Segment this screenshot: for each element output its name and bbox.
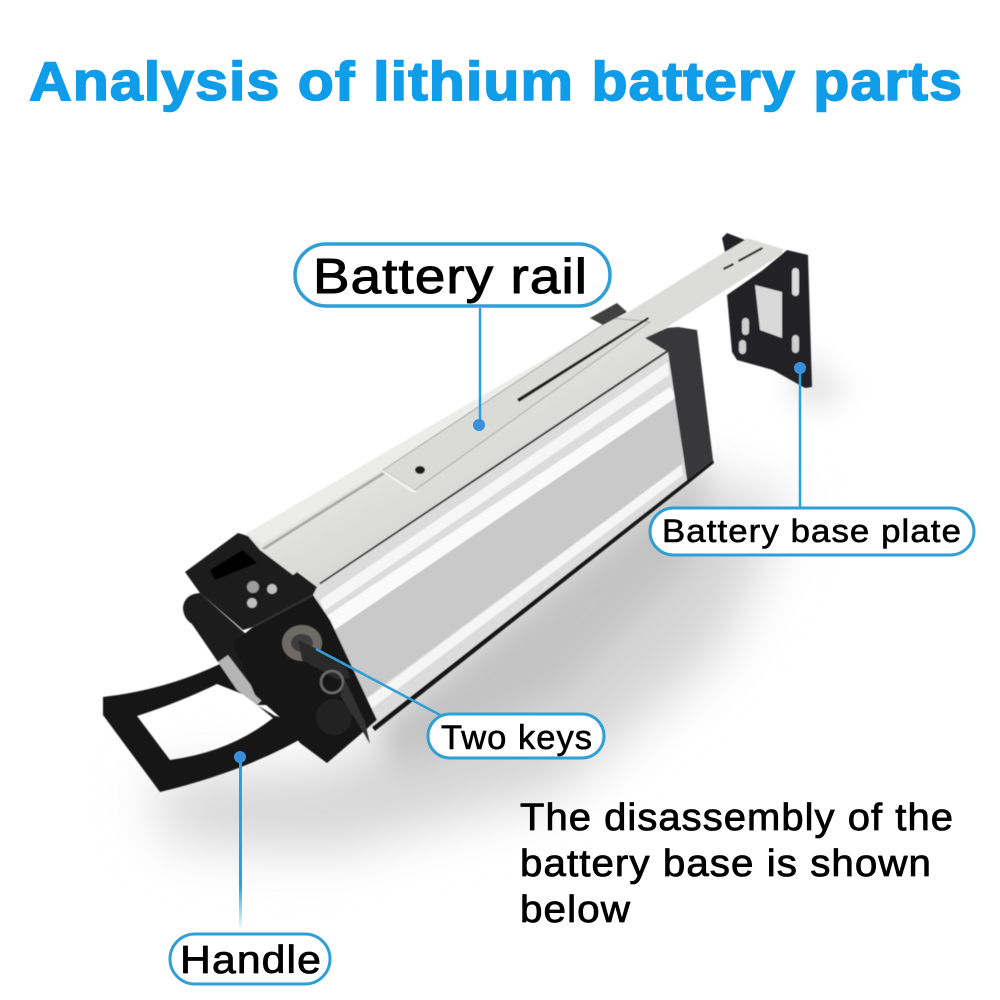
callout: two keys: Two keys bbox=[441, 719, 593, 757]
callout: handle bbox=[170, 751, 330, 984]
lock cylinder bbox=[282, 625, 322, 661]
battery side face bbox=[312, 352, 687, 728]
battery top face bbox=[240, 320, 668, 592]
front face of housing bbox=[233, 595, 377, 763]
base plate bbox=[722, 233, 812, 388]
callout: battery base plate: Battery base plate bbox=[662, 513, 962, 549]
callout: battery base plate bbox=[650, 362, 974, 555]
callout: battery rail: Battery rail bbox=[313, 250, 588, 304]
disassembly note bbox=[520, 797, 954, 931]
disassembly note: below bbox=[520, 889, 631, 931]
battery illustration bbox=[103, 233, 812, 792]
battery rail plate bbox=[382, 317, 650, 493]
top mount block bbox=[185, 533, 317, 630]
lock housing side bbox=[183, 593, 285, 705]
rail stop tab bbox=[590, 303, 627, 325]
rail extension strip bbox=[612, 238, 783, 338]
rear end cap bbox=[645, 327, 713, 480]
keys bbox=[298, 640, 370, 744]
floor shadow bbox=[150, 350, 850, 850]
disassembly note: The disassembly of the bbox=[520, 797, 954, 839]
callout: battery rail bbox=[295, 244, 610, 431]
callout: handle: Handle bbox=[180, 939, 322, 982]
handle bbox=[103, 664, 311, 792]
title: Analysis of lithium battery parts bbox=[29, 50, 963, 112]
callout: two keys bbox=[316, 649, 604, 758]
disassembly note: battery base is shown bbox=[520, 843, 932, 885]
